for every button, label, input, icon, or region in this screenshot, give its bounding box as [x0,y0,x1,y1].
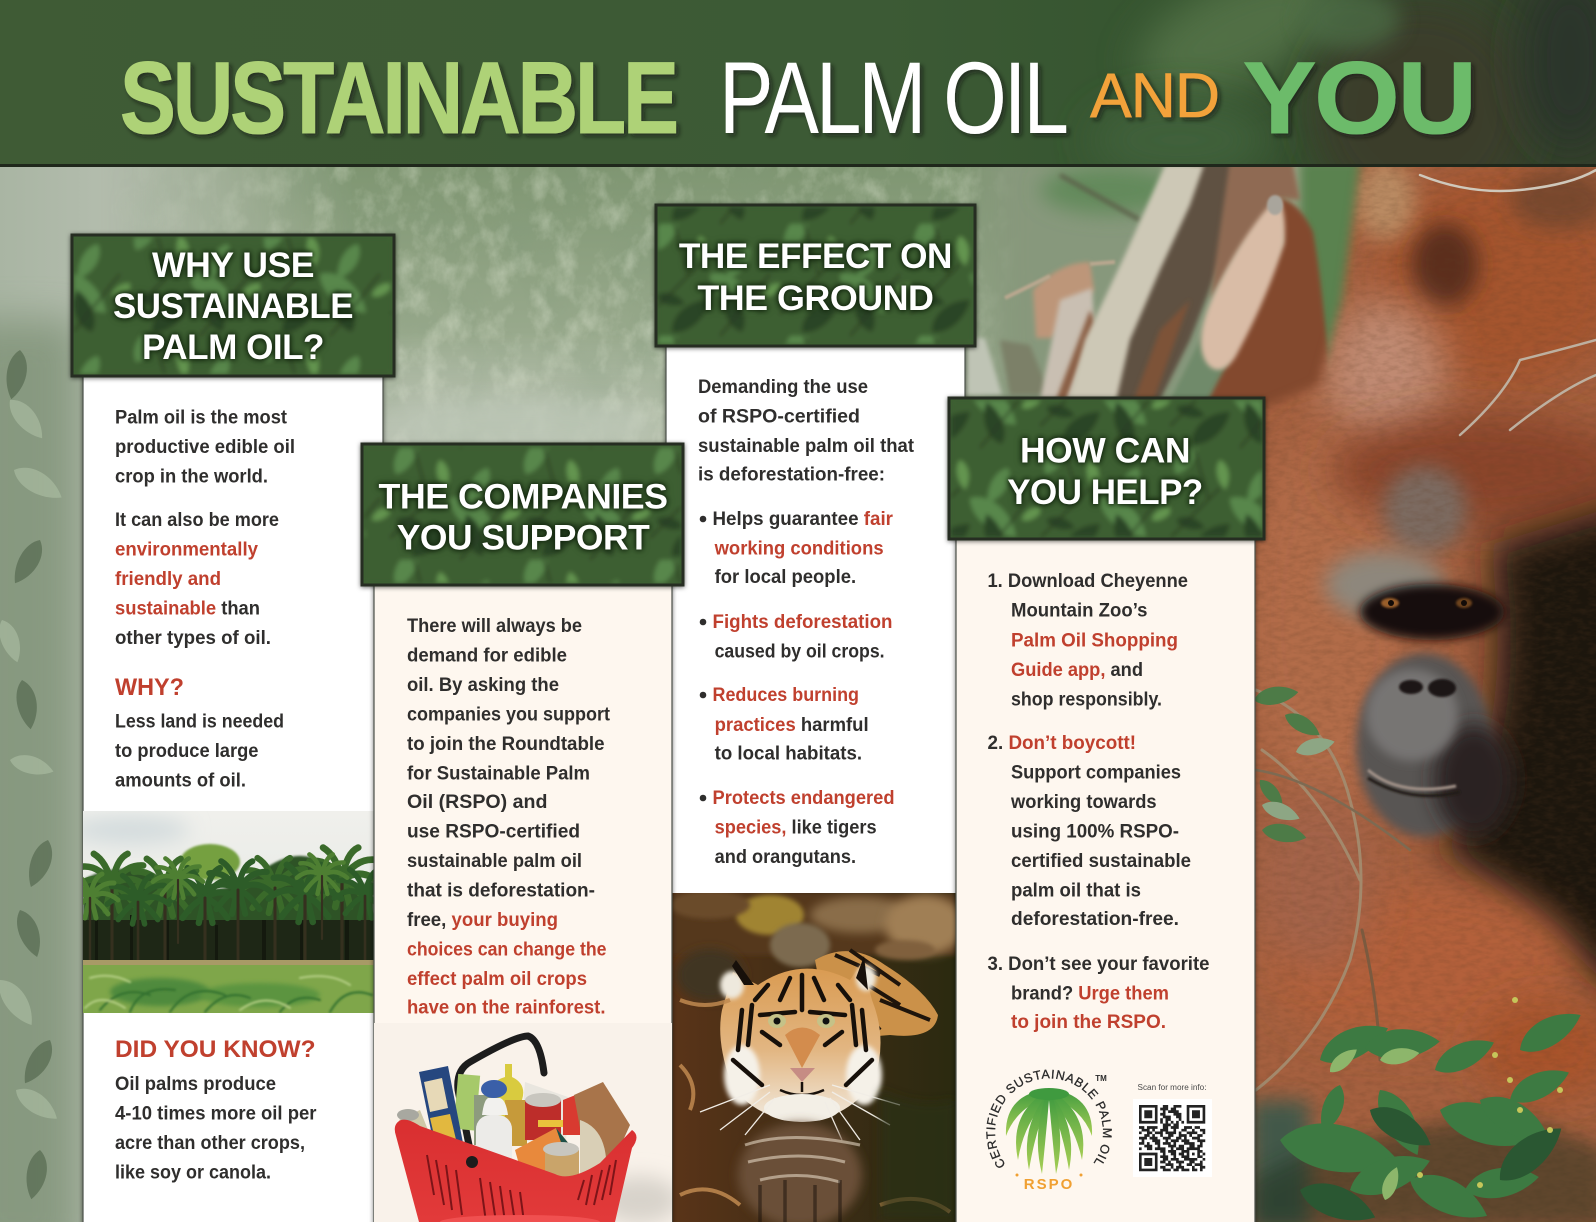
tiger head [720,962,881,1122]
body text: why: Palm oil is the most [115,407,288,428]
numbered list: actions: brand? Urge them [1011,984,1169,1004]
heading text: companies [378,478,668,558]
body text: companies: use RSPO-certified [407,822,580,843]
banner photo tones [1112,0,1596,164]
body text: companies: effect palm oil crops [407,969,587,990]
heading text: effect on the ground: THE EFFECT ON [679,237,952,276]
shoulder and upper fur [1380,170,1596,390]
panel: why use sustainable palm oil [62,235,396,1222]
heading box: why use [72,235,394,376]
bullet list: benefits: and orangutans. [715,847,856,868]
bullet list: benefits: Helps guarantee fair [712,509,894,530]
body text: why: sustainable than [115,599,260,620]
heading text: why use [113,246,353,367]
numbered list: actions: to join the RSPO. [1011,1012,1166,1033]
numbered list: actions: shop responsibly. [1011,689,1162,710]
bullet list: benefits: species, like tigers [715,818,877,839]
body text: why: friendly and [115,569,221,590]
bullet list: benefits: to local habitats. [715,743,862,764]
body text: did you know: like soy or canola. [115,1163,271,1184]
leaves near the lower right [1250,683,1596,1222]
header banner [0,0,1596,167]
body text: why: productive edible oil [115,437,295,458]
numbered list: actions: Mountain Zoo’s [1011,601,1148,622]
body text: less land: Less land is needed [115,712,284,733]
numbered list: actions: 2. Don’t boycott! [988,733,1136,754]
photo: tiger in water [670,891,965,1222]
subheading: why: WHY? [115,674,184,701]
bullet list: benefits: Protects endangered [712,788,894,809]
heading text: effect on the ground: THE GROUND [697,279,933,318]
body text: effect intro: Demanding the use [698,377,868,398]
body text: companies: choices can change the [407,940,606,961]
head fur [1256,445,1408,788]
numbered list: actions: certified sustainable [1011,851,1191,872]
photo: shopping basket [374,1023,680,1222]
body text: less land: to produce large [115,741,258,762]
bullet list: benefits: caused by oil crops. [715,642,885,662]
numbered list: actions: Support companies [1011,763,1181,784]
branches [1256,170,1596,1090]
title: YOU [1243,41,1475,155]
branch hand [1033,262,1094,338]
body text: companies: that is deforestation- [407,881,595,902]
body text: companies: Oil (RSPO) and [407,792,548,813]
numbered list: actions: deforestation-free. [1011,909,1179,930]
body text: companies: sustainable palm oil [407,851,582,872]
body text: effect intro: is deforestation-free: [698,464,885,485]
body text: less land [115,712,284,792]
face [1325,551,1514,837]
title: SUSTAINABLE [120,41,676,155]
heading text: how can you help: YOU HELP? [1007,473,1203,512]
body text: companies: There will always be [407,616,582,637]
heading text: companies: THE COMPANIES [378,478,668,516]
numbered list: actions: using 100% RSPO- [1011,822,1179,843]
heading text: how can you help [1007,432,1203,512]
heading text: why use: SUSTAINABLE [113,287,353,326]
panel: how can you help [944,394,1268,1222]
numbered list: actions: Guide app, and [1011,660,1143,681]
subheading: did you know: DID YOU KNOW? [115,1036,316,1063]
numbered list: actions: working towards [1010,792,1157,813]
title: AND [1090,61,1219,131]
bullet list: benefits [700,509,894,868]
raised arm [1210,160,1300,300]
numbered list: actions [988,571,1210,1033]
body text: did you know [115,1074,317,1184]
logo: RSPO certified sustainable palm oil: TM [1095,1074,1107,1083]
heading text: companies: YOU SUPPORT [397,518,649,558]
QR code with scan prompt [1133,1083,1212,1177]
body text: less land: amounts of oil. [115,771,246,792]
panel: the companies you support [362,444,683,1222]
title [120,41,1475,155]
bullet list: benefits: practices harmful [715,715,869,736]
photo: oil palm plantation [83,811,374,1013]
basket body [395,1120,636,1222]
heading text: how can you help: HOW CAN [1020,432,1190,470]
heading text: why use: WHY USE [152,246,314,285]
body text: why: crop in the world. [115,466,268,487]
shadow side of trunk [1114,167,1232,396]
body text: why [115,407,295,649]
body text: companies: have on the rainforest. [407,998,606,1019]
bullet list: benefits: for local people. [715,567,856,588]
orangutan body [1240,150,1596,1222]
foliage down the left edge [0,320,80,1222]
heading text: effect on the ground [679,237,952,318]
body text: effect intro [698,377,915,485]
misty trees beside the trunk [978,167,1213,396]
body text: effect intro: sustainable palm oil that [698,436,915,457]
body text: companies: companies you support [407,705,611,726]
body text: why: environmentally [115,540,258,561]
body text: companies: to join the Roundtable [407,734,604,755]
chest fur [1270,885,1570,1045]
body text: why: other types of oil. [115,628,271,649]
heading box: companies [362,444,683,585]
QR code with scan prompt: Scan for more info: [1138,1083,1206,1092]
tree trunk [1066,165,1204,410]
body text: companies: oil. By asking the [407,675,559,696]
body text: companies: free, your buying [407,910,558,931]
tiger body [815,951,938,1040]
heading text: why use: PALM OIL? [142,328,324,367]
numbered list: actions: 3. Don’t see your favorite [988,954,1210,975]
body text: why: It can also be more [115,510,279,531]
panel: the effect on the ground [656,205,975,1222]
body text: companies: demand for edible [407,646,567,666]
heading box: effect on the ground [656,205,975,346]
body text: companies: for Sustainable Palm [407,764,590,785]
bullet list: benefits: working conditions [714,539,884,560]
body text: did you know: acre than other crops, [115,1133,305,1154]
logo: RSPO certified sustainable palm oil: CERTIFIED SUSTAINABLE PALM OIL [986,1070,1112,1168]
body text: did you know: Oil palms produce [115,1074,276,1095]
body text: did you know: 4-10 times more oil per [115,1104,317,1125]
heading box: how can you help [949,398,1264,539]
shadowed right side [1440,480,1596,1080]
logo: RSPO certified sustainable palm oil: RSPO [1024,1176,1074,1193]
bullet list: benefits: Reduces burning [712,685,859,706]
numbered list: actions: 1. Download Cheyenne [988,571,1188,592]
bullet list: benefits: Fights deforestation [712,612,892,633]
misty rainforest canopy [126,167,1000,438]
palm fronds [1006,1088,1092,1174]
numbered list: actions: Palm Oil Shopping [1011,630,1178,651]
numbered list: actions: palm oil that is [1011,881,1141,902]
orangutan and trees [967,130,1596,1222]
title: PALM OIL [719,41,1067,155]
reflection [738,1123,862,1222]
body text: effect intro: of RSPO-certified [698,406,860,427]
basket contents [397,1064,630,1180]
body text: companies [407,616,611,1019]
